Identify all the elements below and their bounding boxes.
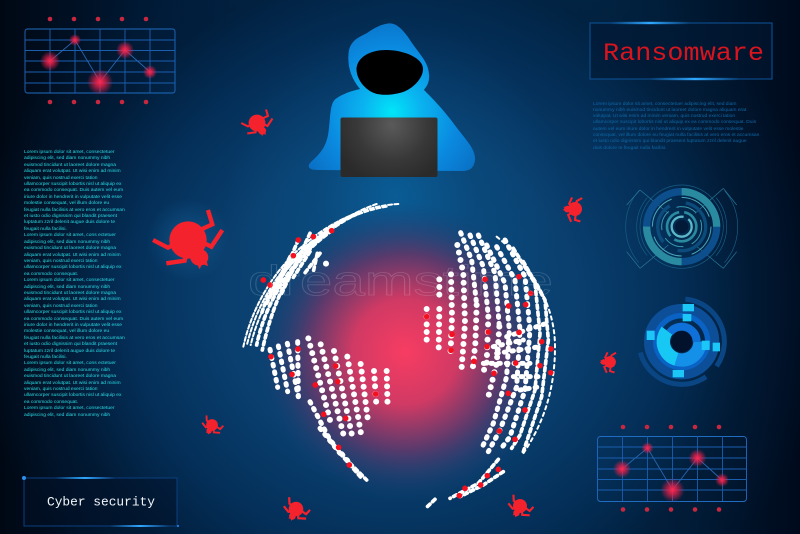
bug: bottom right bbox=[504, 489, 536, 523]
text block: left column: aliquam erat volutpat. Ut wisi enim ad minim bbox=[24, 381, 121, 386]
watermark text: dreamstime bbox=[248, 257, 553, 304]
text block: left column: aliquam erat volutpat. Ut wisi enim ad minim bbox=[24, 252, 121, 258]
bug: left lower bbox=[198, 411, 226, 439]
text block: left column: euismod tincidunt ut laoreet dolore magna bbox=[24, 291, 116, 296]
text block: left column: ullamcorper suscipit lobortis nisl ut aliquip ex bbox=[24, 182, 121, 187]
HUD dial: teal radar bbox=[603, 148, 761, 306]
text block: left column: iriure dolor in hendrerit in vulputate velit esse bbox=[24, 195, 122, 200]
hacker: black face bbox=[356, 50, 423, 95]
globe bbox=[243, 202, 555, 507]
bug: large left bbox=[146, 198, 230, 282]
text block: left column: Lorem ipsum dolor sit amet, cons ectetuer bbox=[24, 361, 116, 366]
text block: left column: aliquam erat volutpat. Ut wisi enim ad minim bbox=[24, 169, 121, 174]
title panel: Ransomware bbox=[590, 22, 772, 80]
bug: right lower bbox=[596, 348, 624, 376]
text block: left column: ea commodo consequat. Duis autem vel eum bbox=[24, 188, 123, 193]
text block: left column: et iusto odio dignissim qui blandit praesent bbox=[24, 342, 117, 347]
globe core: red glow bbox=[255, 202, 555, 502]
text block: right column: et iusto odio dignissim qui blandit praesent luptatum zzril delenit augue bbox=[593, 139, 747, 144]
text block: left column: aliquam erat volutpat. Ut wisi enim ad minim bbox=[24, 297, 121, 302]
HUD dial: bright blue ring bbox=[635, 295, 728, 388]
text block: left column: adipiscing elit, sed diam nonummy nibh bbox=[24, 156, 110, 161]
text block: right column bbox=[593, 102, 760, 151]
text block: left column: feugiat nulla facilisis at vero eros et accumsan bbox=[24, 336, 125, 341]
hacker figure bbox=[309, 23, 475, 177]
text block: left column: molestie consequat, vel illum dolore eu bbox=[24, 201, 109, 206]
text block: left column: molestie consequat, vel illum dolore eu bbox=[24, 329, 109, 334]
text block: left column: Lorem ipsum dolor sit amet, consectetuer bbox=[24, 406, 115, 411]
text block: right column: consequat, vel illum dolore eu feugiat nulla facilisis at vero eros et accumsan bbox=[593, 133, 759, 138]
text block: left column: ullamcorper suscipit lobortis nisl ut aliquip ex bbox=[24, 265, 121, 270]
hacker: laptop bbox=[340, 118, 438, 177]
text block: left column: Lorem ipsum dolor sit amet, consectetuer bbox=[24, 150, 115, 155]
chart: top-left grid line chart bbox=[25, 17, 175, 104]
text block: right column: autem vel eum iriure dolor in hendrerit in vulputate velit esse molestie bbox=[593, 127, 744, 132]
text block: left column: et iusto odio dignissim qui blandit praesent bbox=[24, 214, 117, 219]
bug: right upper bbox=[559, 192, 592, 226]
label text: Cyber security bbox=[47, 494, 155, 510]
text block: left column: feugait nulla facilisi. bbox=[24, 355, 67, 360]
text block: left column: Lorem ipsum dolor sit amet, cons ectetuer bbox=[24, 233, 116, 238]
text block: left column: feugait nulla facilisi. bbox=[24, 227, 67, 232]
chart: bottom-right grid line chart bbox=[597, 425, 747, 512]
text block: left column: luptatum zzril delenit augue duis dolore te bbox=[24, 349, 115, 354]
text block: left column: luptatum zzril delenit augue duis dolore te bbox=[24, 220, 115, 225]
text block: left column: iriure dolor in hendrerit in vulputate velit esse bbox=[24, 323, 122, 328]
text block: left column: adipiscing elit, sed diam nonummy nibh bbox=[24, 368, 110, 373]
hacker: hood and body bbox=[309, 23, 475, 171]
text block: right column: Lorem ipsum dolor sit amet, consectetuer adipiscing elit, sed diam bbox=[593, 102, 736, 106]
bug: top centre-left bbox=[241, 110, 272, 136]
text block: left column: veniam, quis nostrud exerci tation bbox=[24, 387, 98, 392]
text block: left column: ea commodo consequat. bbox=[24, 400, 78, 405]
title text: Ransomware bbox=[603, 39, 764, 68]
text block: left column: veniam, quis nostrud exerci tation bbox=[24, 259, 98, 264]
text block: left column: veniam, quis nostrud exerci tation bbox=[24, 176, 98, 181]
text block: right column: duis dolore te feugait nulla facilisi. bbox=[593, 146, 666, 151]
text block: left column: ullamcorper suscipit lobortis nisl ut aliquip ex bbox=[24, 310, 121, 315]
text block: left column: feugiat nulla facilisis at vero eros et accumsan bbox=[24, 208, 125, 213]
text block: left column: euismod tincidunt ut laoreet dolore magna bbox=[24, 246, 116, 251]
text block: left column: Lorem ipsum dolor sit amet, consectetuer bbox=[24, 278, 115, 283]
globe: red infected dots bbox=[263, 231, 551, 496]
text block: left column: veniam, quis nostrud exerci tation bbox=[24, 304, 98, 309]
text block: left column: adipiscing elit, sed diam nonummy nibh bbox=[24, 285, 110, 290]
text block: left column: ullamcorper suscipit lobortis nisl ut aliquip ex bbox=[24, 393, 121, 398]
text block: left column bbox=[24, 150, 125, 418]
text block: right column: nonummy nibh euismod tincidunt ut laoreet dolore magna aliquam erat bbox=[593, 108, 746, 113]
globe: dotted continents bbox=[243, 204, 555, 507]
text block: right column: volutpat. Ut wisi enim ad minim veniam, quis nostrud exerci tation bbox=[593, 114, 735, 119]
text block: left column: euismod tincidunt ut laoreet dolore magna bbox=[24, 163, 116, 168]
text block: left column: euismod tincidunt ut laoreet dolore magna bbox=[24, 374, 116, 379]
text block: left column: adipiscing elit, sed diam nonummy nibh bbox=[24, 413, 110, 418]
text block: left column: ea commodo consequat. bbox=[24, 272, 78, 277]
text block: left column: adipiscing elit, sed diam nonummy nibh bbox=[24, 240, 110, 245]
text block: left column: ea commodo consequat. Duis autem vel eum bbox=[24, 317, 123, 322]
text block: right column: ullamcorper suscipit lobortis nisl ut aliquip ex ea commodo consequat. Duis bbox=[593, 120, 756, 125]
bug: bottom left bbox=[279, 491, 313, 526]
label panel: Cyber security bbox=[22, 476, 179, 527]
